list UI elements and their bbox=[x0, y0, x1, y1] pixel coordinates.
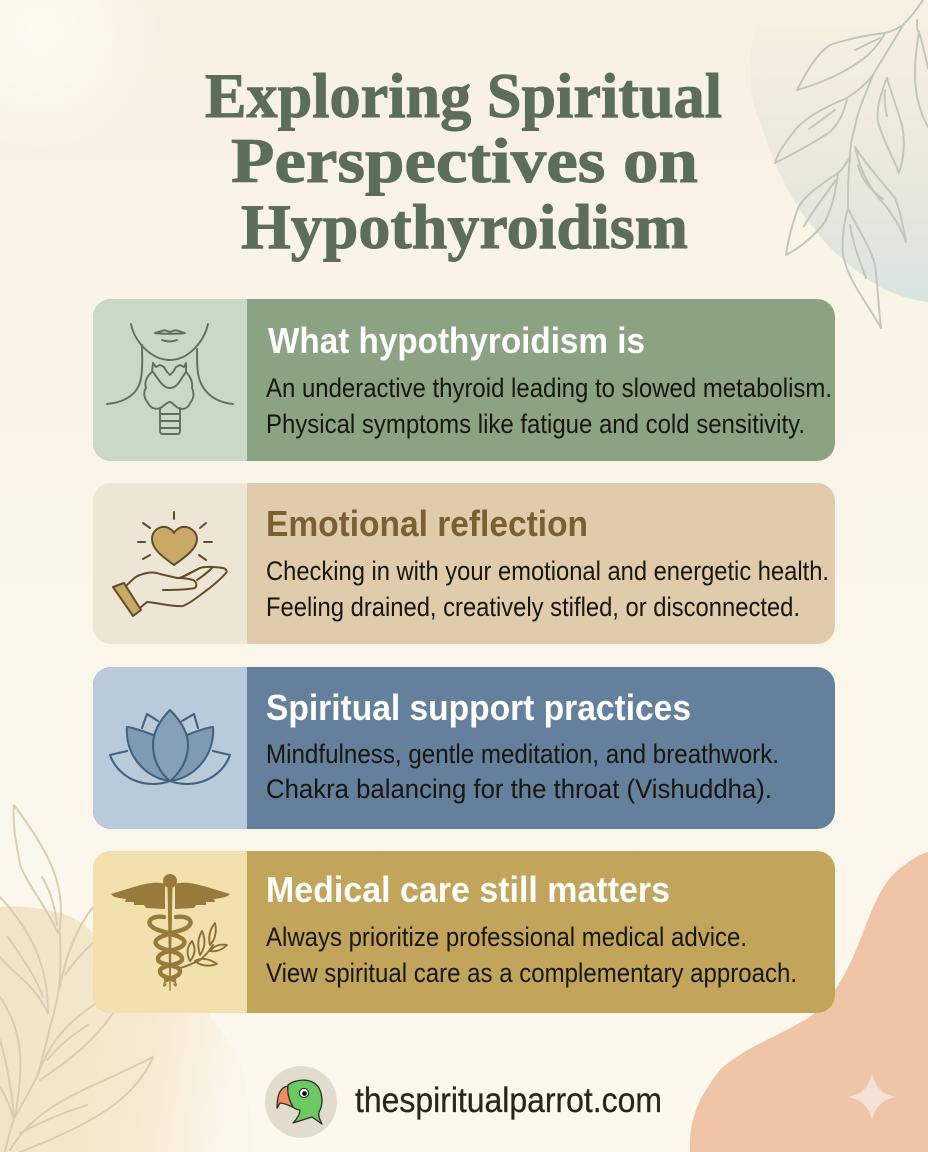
title bbox=[205, 60, 722, 262]
title: Perspectives on bbox=[231, 125, 698, 196]
text block: Checking in with your emotional and energetic health. bbox=[266, 556, 829, 586]
heading: What hypothyroidism is bbox=[268, 320, 645, 361]
panel: what hypothyroidism is bbox=[93, 299, 835, 461]
text block: An underactive thyroid leading to slowed metabolism. bbox=[266, 373, 832, 403]
text block: Physical symptoms like fatigue and cold sensitivity. bbox=[266, 409, 805, 439]
icon: hand holding heart bbox=[113, 512, 227, 616]
text block bbox=[266, 556, 829, 622]
footer logo: parrot bbox=[265, 1066, 337, 1138]
heading: Medical care still matters bbox=[266, 869, 670, 910]
icon: lotus bbox=[110, 710, 230, 784]
blob: bottom-left tan bbox=[0, 906, 253, 1152]
blob: bottom-right peach bbox=[690, 852, 928, 1152]
title: Hypothyroidism bbox=[241, 191, 688, 262]
leaf branch: bottom-left bbox=[0, 805, 153, 1152]
footer website: thespiritualparrot.com bbox=[355, 1081, 662, 1120]
icon: neck and thyroid bbox=[107, 324, 233, 434]
text block bbox=[266, 922, 797, 988]
text block bbox=[266, 373, 832, 439]
text block: Feeling drained, creatively stifled, or disconnected. bbox=[266, 592, 800, 622]
panel: emotional reflection bbox=[93, 483, 835, 644]
text block: Always prioritize professional medical advice. bbox=[266, 922, 747, 952]
blob: top-right sage bbox=[750, 0, 928, 302]
panel: spiritual support practices bbox=[93, 667, 835, 829]
text block: Mindfulness, gentle meditation, and breathwork. bbox=[266, 739, 779, 769]
text block bbox=[266, 739, 779, 804]
leaf branch: top-right bbox=[775, 0, 928, 328]
top-left light glow bbox=[0, 0, 200, 180]
heading: Emotional reflection bbox=[266, 503, 588, 544]
icon: caduceus bbox=[111, 874, 230, 991]
panel: medical care still matters bbox=[93, 851, 835, 1013]
title: Exploring Spiritual bbox=[205, 60, 722, 131]
text block: View spiritual care as a complementary approach. bbox=[266, 958, 797, 988]
icon: sparkle bbox=[848, 1073, 896, 1120]
text block: Chakra balancing for the throat (Vishuddha). bbox=[266, 774, 772, 804]
heading: Spiritual support practices bbox=[266, 687, 691, 728]
